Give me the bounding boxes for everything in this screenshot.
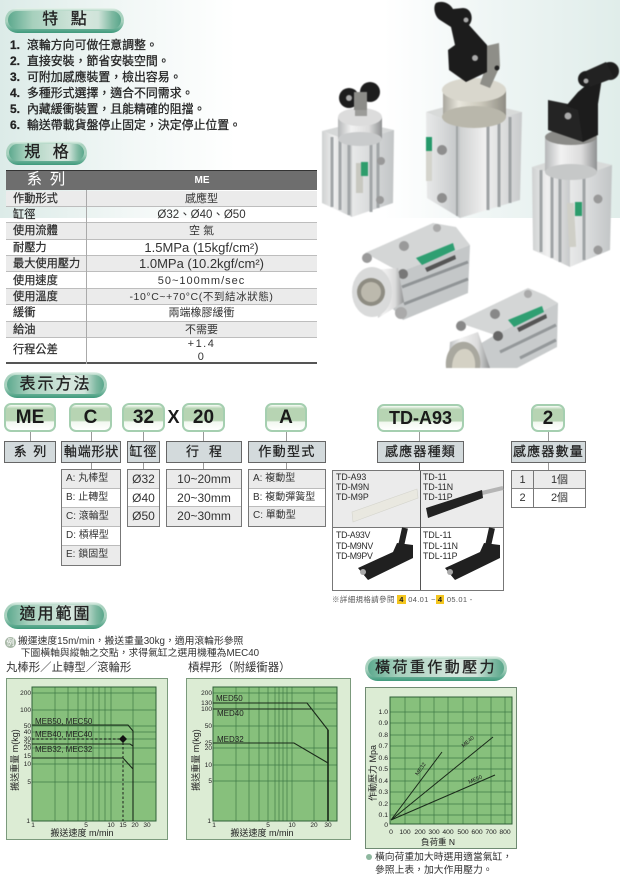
chart: transport mass vs speed, rod types: 20 [24,745,31,752]
feature 1: 滾輪方向可做任意調整。 [27,38,158,52]
sensor table [332,470,504,591]
sensor quantity table [511,470,586,508]
row: lubrication: 不需要 [185,324,218,336]
chart: lateral load operating pressure: 0.7 [379,743,388,750]
code box: C: C [84,407,97,428]
chart: lateral load operating pressure: 0.8 [379,732,388,739]
label: action type [248,441,326,463]
catalog reference note: ※詳細規格請參閱 4 04.01 ~ 4 05.01 - [332,595,473,604]
heading: features [5,8,124,33]
spec table header [6,170,317,190]
heading: features: 特 點 [42,11,87,28]
chart: transport mass vs speed, rod types: 10 [24,761,31,768]
heading: lateral load operating pressure [365,656,507,681]
chart: transport mass vs speed, lever type: MED40 [217,709,244,718]
label: sensor quantity [511,441,586,463]
chart: transport mass vs speed, rod types: 1 [31,822,35,829]
chart: transport mass vs speed, lever type: MED32 [217,735,244,744]
bullet icon [366,854,372,860]
chart: transport mass vs speed, rod types: 5 [84,822,88,829]
code box: sensor: TD-A93 [389,408,452,428]
options: stroke: 20~30mm [177,509,231,523]
options: action type: A: 複動型 [253,473,295,484]
options: bore [127,469,160,527]
chart: transport mass vs speed, lever type: 搬送速度 m/min [230,827,294,838]
chart: transport mass vs speed, lever type: 30 [324,822,332,829]
chart: transport mass vs speed, lever type: 5 [266,822,270,829]
chart: lateral load operating pressure: 作動壓力 Mpa [367,745,378,801]
chart: lateral load operating pressure: 100 [399,829,411,836]
row: actuation: 作動形式 [13,192,58,204]
row: proof pressure [6,240,317,256]
heading: specifications: 規 格 [24,144,69,161]
row: lubrication [6,322,317,338]
sensor models: TDL-11: TDL-11 [423,530,452,540]
options: rod end shape: C: 滾輪型 [66,511,109,522]
chart: transport mass vs speed, rod types: MEB50, MEC50 [35,717,93,726]
row: fluid [6,223,317,240]
options: bore: Ø40 [132,491,155,505]
sensor: L-type 2 [445,528,500,580]
chart: lateral load operating pressure: 700 [485,829,497,836]
chart: lateral load operating pressure: 0.5 [379,766,388,773]
chart: transport mass vs speed, rod types: MEB32, MEC32 [35,745,93,754]
code box: 20 [182,403,225,432]
chart: transport mass vs speed, lever type: 20 [310,822,318,829]
row: max pressure: 1.0MPa (10.2kgf/cm²) [139,256,264,271]
chart: transport mass vs speed, rod types: 搬送重量 m(kg) [9,729,20,791]
spec table [6,170,317,364]
row: cushion: 兩端橡膠緩衝 [168,307,234,319]
chart: transport mass vs speed, rod types: 100 [20,707,31,714]
feature 6: 輸送帶載貨盤停止固定，決定停止位置。 [27,118,241,132]
sensor models: TDL-11: TDL-11P [423,551,458,561]
sensor cell backgrounds [333,471,503,528]
heading: specifications [6,141,87,165]
chart: transport mass vs speed, rod types: MEB40, MEC40 [35,730,93,739]
feature 5: 5. [10,102,20,116]
lateral load note [375,852,512,876]
multiply sign: X [167,407,180,427]
row: stroke tolerance: 0 [198,351,205,363]
feature 3: 3. [10,70,20,84]
code box: sensor count: 2 [543,408,553,429]
chart: transport mass vs speed, rod types: 30 [24,736,31,743]
sensor: flat light [352,489,418,522]
options: rod end shape: E: 鎖固型 [66,549,108,560]
sensor: L-type 1 [358,528,413,580]
chart: lateral load operating pressure: 0 [384,822,388,829]
chart: transport mass vs speed, lever type: 200 [201,690,212,697]
sensor models: TDL-11: TDL-11N [423,540,458,550]
row: fluid: 使用流體 [13,225,58,237]
chart: transport mass vs speed, rod types [6,678,168,840]
quantity row 1: 1 [519,474,526,486]
quantity row 2 [519,492,568,504]
row: stroke tolerance: 行程公差 [13,344,58,356]
row: cushion [6,305,317,322]
feature 1: 1. [10,38,20,52]
chart: transport mass vs speed, rod types: 15 [119,822,127,829]
chart: transport mass vs speed, rod types: 15 [24,753,31,760]
options: action type [248,469,326,527]
row: temperature: 使用溫度 [13,291,58,303]
sensor models: TD-A93: TD-A93 [336,472,366,482]
chart: transport mass vs speed, rod types: 搬送速度 m/min [50,827,114,838]
row: bore: Ø32、Ø40、Ø50 [157,209,246,221]
label: action type: 作動型式 [258,444,316,459]
chart: transport mass vs speed, lever type: 20 [205,745,212,752]
sensor models: TD-A93V: TD-M9NV [336,540,373,550]
row: stroke tolerance [6,338,317,364]
photo: right lever cylinder [532,62,619,267]
row: stroke tolerance: +1.4 [188,338,215,350]
chart: lateral load operating pressure [366,688,516,848]
row: cushion: 緩衝 [13,307,35,319]
row: speed: 使用速度 [13,274,58,286]
chart: transport mass vs speed, lever type: 50 [205,723,212,730]
row: actuation: 感應型 [185,192,218,204]
row: proof pressure: 耐壓力 [13,242,47,254]
chart: transport mass vs speed, lever type: 5 [208,778,212,785]
code box: A [265,403,307,432]
lateral load note: 橫向荷重加大時選用適當氣缸， [375,852,512,863]
chart: lateral load operating pressure: ME40 [461,735,476,749]
chart: transport mass vs speed, rod types: 50 [24,723,31,730]
chart: lateral load operating pressure: ME50 [468,774,483,786]
code box: ME: ME [16,407,44,428]
chart: lateral load operating pressure: 0.3 [379,789,388,796]
sensor models: TD-A93V [336,530,374,561]
spec table header: 系 列 [27,171,65,188]
chart: transport mass vs speed, rod types: 200 [20,690,31,697]
sensor models: TD-A93V: TD-M9PV [336,551,373,561]
chart: lateral load operating pressure: 600 [471,829,483,836]
feature 4: 多種形式選擇，適合不同需求。 [27,86,193,100]
options: rod end shape: A: 丸棒型 [66,473,108,484]
row: temperature [6,289,317,305]
chart: transport mass vs speed, lever type [186,678,350,840]
code box: sensor count [531,404,565,432]
options: action type: B: 複動彈簧型 [253,492,315,503]
chart: lateral load operating pressure: 0 [389,829,393,836]
code box: A: A [279,407,293,428]
chart: lateral load operating pressure: 300 [428,829,440,836]
label: series: 系 列 [14,444,46,459]
chart title: lever: 槓桿形（附緩衝器） [188,662,291,674]
quantity row 2: 2 [519,492,526,504]
sensor models: TD-11 [423,472,453,502]
row: bore [6,207,317,223]
chart: transport mass vs speed, lever type: 25 [205,740,212,747]
photo: lying cylinder [352,223,470,320]
row: speed [6,272,317,289]
chart: lateral load operating pressure: 500 [457,829,469,836]
feature list [10,38,241,132]
options: rod end shape: D: 槓桿型 [66,530,109,541]
chart: transport mass vs speed, rod types: 30 [143,822,151,829]
row: max pressure: 最大使用壓力 [13,258,80,270]
code box: 32: 32 [133,407,154,428]
chart: transport mass vs speed, rod types: 5 [27,779,31,786]
row: proof pressure: 1.5MPa (15kgf/cm²) [144,240,259,255]
feature 3: 可附加感應裝置，檢出容易。 [27,70,182,84]
options: stroke: 20~30mm [177,491,231,505]
feature 6: 6. [10,118,20,132]
sensor models: TD-A93V: TD-A93V [336,530,370,540]
sensor models: TD-A93: TD-M9N [336,482,369,492]
row: fluid: 空 氣 [189,225,214,237]
chart: lateral load operating pressure: 0.2 [379,801,388,808]
chart: transport mass vs speed, lever type: 1 [207,818,211,825]
background tint [0,0,620,218]
label: sensor type: 感應器種類 [385,444,456,459]
sensor models: TD-11: TD-11N [423,482,453,492]
row: lubrication: 給油 [13,324,35,336]
chart: lateral load operating pressure: 200 [414,829,426,836]
feature 2: 直接安裝，節省安裝空間。 [27,54,170,68]
chart: transport mass vs speed, rod types: 25 [24,741,31,748]
sensor models: TD-11: TD-11P [423,492,453,502]
options: stroke [166,469,242,527]
chart: lateral load operating pressure: 800 [499,829,511,836]
label: rod end shape [61,441,121,463]
chart: transport mass vs speed, rod types: 10 [107,822,115,829]
chart: lateral load operating pressure: 0.1 [379,812,388,819]
lateral load note: 參照上表，加大作用壓力。 [375,865,493,876]
sensor models: TD-11: TD-11 [423,472,447,482]
heading: ordering code: 表示方法 [19,376,92,393]
photo: tall lever cylinder [426,2,522,218]
heading: lateral load operating pressure: 橫荷重作動壓力 [375,659,497,676]
label: sensor type [377,441,464,463]
chart: transport mass vs speed, lever type: 10 [288,822,296,829]
row: speed: 50~100mm/sec [158,274,245,286]
chart: transport mass vs speed, lever type: 搬送重量 m(kg) [190,729,201,791]
code box: 32 [122,403,165,432]
quantity row 1: 1個 [551,474,568,486]
code box: C [69,403,112,432]
options: action type: C: 單動型 [253,510,296,521]
row: actuation [6,190,317,207]
chart: lateral load operating pressure: 0.9 [379,720,388,727]
chart: transport mass vs speed, lever type: MED50 [216,694,243,703]
heading: ordering code [4,372,107,398]
quantity row 1 [512,471,585,489]
chart: transport mass vs speed, lever type: 1 [212,822,216,829]
row: max pressure [6,256,317,272]
chart: lateral load operating pressure: ME32 [415,762,428,777]
chart: lateral load operating pressure: 1.0 [379,709,388,716]
example text [18,636,259,659]
heading: applicable range: 適用範圍 [19,606,92,623]
code box: 20: 20 [193,407,214,428]
chart: lateral load operating pressure: 400 [442,829,454,836]
code box: ME [4,403,56,432]
chart: lateral load operating pressure: 負荷重 N [421,837,455,847]
chart: lateral load operating pressure: 0.4 [379,778,388,785]
sensor models: TD-A93 [336,472,369,502]
options: rod end shape: B: 止轉型 [66,492,108,503]
feature 2: 2. [10,54,20,68]
options: bore: Ø32 [132,472,155,486]
chart title: round rod: 丸棒形／止轉型／滾輪形 [6,662,131,674]
spec table header: ME [194,175,210,186]
chart: transport mass vs speed, lever type: 10 [205,762,212,769]
heading: applicable range [4,602,107,629]
chart: transport mass vs speed, rod types: 40 [24,729,31,736]
example icon: 例 [6,638,14,647]
feature 4: 4. [10,86,20,100]
photo: lying cylinder front [446,288,558,368]
label: series [4,441,56,463]
chart: lateral load operating pressure: 0.6 [379,755,388,762]
chart: transport mass vs speed, lever type: 130 [201,700,212,707]
options: bore: Ø50 [132,509,155,523]
label: bore: 缸徑 [129,444,158,459]
example text: 搬運速度15m/min，搬送重量30kg，適用滾輪形參照 [18,636,243,647]
row: temperature: -10°C~+70°C(不到結冰狀態) [129,291,274,303]
example icon [5,637,16,648]
chart: transport mass vs speed, rod types: 1 [26,818,30,825]
chart: transport mass vs speed, lever type: 100 [201,706,212,713]
label: bore [127,441,160,463]
feature 5: 內藏緩衝裝置，且能精確的阻擋。 [27,102,205,116]
sensor models: TDL-11 [423,530,458,561]
options: rod end shape [61,469,121,566]
code box: sensor [377,404,464,432]
quantity row 2: 2個 [551,492,568,504]
sensor models: TD-A93: TD-M9P [336,492,369,502]
row: bore: 缸徑 [13,209,35,221]
label: sensor quantity: 感應器數量 [513,444,584,459]
label: rod end shape: 軸端形狀 [64,444,119,459]
chart: transport mass vs speed, rod types: 20 [131,822,139,829]
photo: small roller cylinder [322,82,394,217]
label: stroke: 行 程 [186,444,222,459]
sensor: flat black [426,488,503,518]
label: stroke [166,441,242,463]
example text: 下圖橫軸與縱軸之交點，求得氣缸之選用機種為MEC40 [21,648,259,659]
options: stroke: 10~20mm [177,472,231,486]
